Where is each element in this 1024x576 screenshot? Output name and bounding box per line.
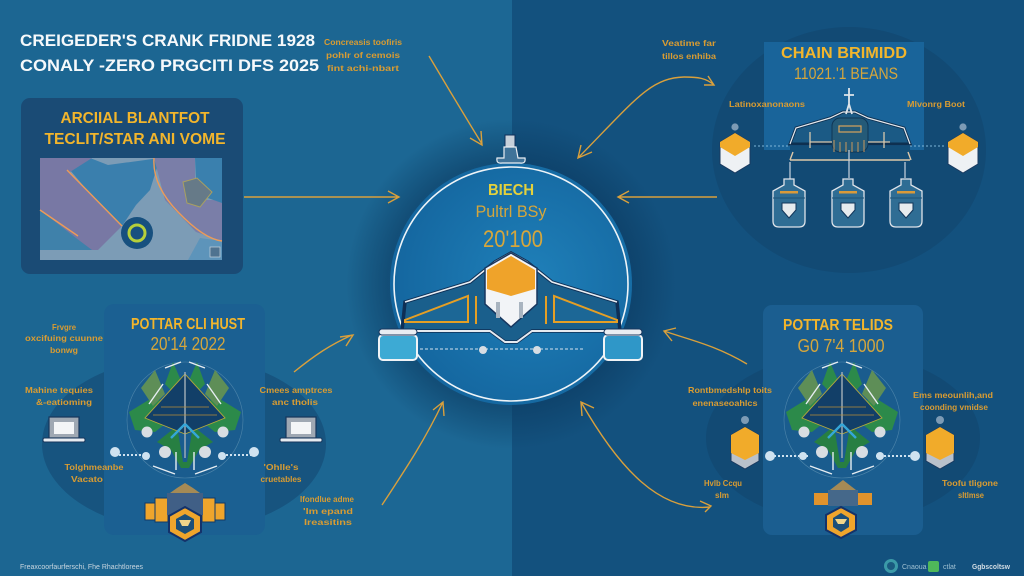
arrow: chain bridge to hub bbox=[618, 76, 717, 203]
arrow: map to hub bbox=[244, 191, 399, 203]
heading: 11021.'1 BEANS bbox=[794, 64, 898, 83]
title: CREIGEDER'S CRANK FRIDNE 1928 bbox=[20, 31, 315, 50]
labels: Frvgre bbox=[52, 322, 76, 332]
icon: cube right bbox=[926, 416, 954, 469]
footer logos bbox=[884, 559, 1011, 573]
icon: cube left bbox=[731, 416, 759, 469]
footer logos: ctlat bbox=[943, 564, 956, 571]
arrow: lower right to hub bbox=[664, 328, 747, 364]
callout: top right text bbox=[662, 38, 717, 61]
icon: network globe bbox=[784, 362, 900, 478]
panel: map bbox=[21, 98, 243, 274]
heading: G0 7'4 1000 bbox=[798, 336, 884, 356]
labels: Vacato bbox=[71, 474, 103, 484]
bridge structure bbox=[395, 253, 640, 354]
labels: Latinoxanonaons bbox=[729, 99, 805, 109]
hub heading: 20'100 bbox=[483, 226, 543, 253]
labels: sItlmse bbox=[958, 490, 984, 500]
icon: left water tank bbox=[379, 329, 417, 360]
panel: lower right bbox=[688, 305, 998, 538]
icon: node dots bbox=[110, 447, 259, 460]
labels: Toofu tligone bbox=[942, 478, 998, 488]
icon: cube right bbox=[948, 123, 978, 173]
labels: Mahine tequies bbox=[25, 385, 93, 395]
arrow: lower centre left to hub bbox=[382, 402, 444, 505]
callout: top right text: Veatime far bbox=[662, 38, 717, 48]
labels bbox=[688, 385, 998, 500]
labels: Hvlb Ccqu bbox=[704, 478, 742, 488]
panel: lower left bbox=[25, 304, 354, 541]
icon: badge bbox=[145, 483, 225, 541]
heading bbox=[131, 316, 245, 354]
labels: Tolghmeanbe bbox=[64, 462, 124, 472]
labels: 'Ohlle's bbox=[264, 462, 299, 472]
hub heading: BIECH bbox=[488, 182, 534, 199]
heading: POTTAR TELIDS bbox=[783, 317, 893, 334]
labels: Mlvonrg Boot bbox=[907, 99, 965, 109]
central hub bbox=[379, 135, 642, 405]
heading bbox=[781, 45, 907, 83]
labels: bonwg bbox=[50, 345, 78, 355]
icon: cube left bbox=[720, 123, 750, 173]
title bbox=[20, 31, 319, 75]
callout: top right text: tillos enhiba bbox=[662, 51, 716, 61]
heading: CHAIN BRIMIDD bbox=[781, 45, 907, 62]
icon: laptop left bbox=[43, 417, 85, 442]
footer logos: Cnaoua bbox=[902, 564, 927, 571]
labels: &-eatioming bbox=[36, 397, 92, 407]
labels: cruetables bbox=[260, 474, 302, 484]
panel heading bbox=[44, 110, 226, 148]
labels: Ifondlue adme bbox=[300, 494, 354, 504]
hub heading bbox=[476, 182, 547, 253]
labels: oxcifuing cuunne bbox=[25, 333, 103, 343]
title: CONALY -ZERO PRGCITI DFS 2025 bbox=[20, 56, 319, 75]
icon: badge bbox=[814, 480, 872, 538]
panel: chain bridge bbox=[712, 27, 986, 273]
callout: top left text: Concreasis toofiris bbox=[324, 37, 402, 47]
labels: enenaseoahlcs bbox=[692, 398, 758, 408]
panel heading: ARCIIAL BLANTFOT bbox=[60, 110, 210, 127]
top valve bbox=[497, 135, 525, 163]
labels: sIm bbox=[715, 490, 729, 500]
icon: central cube bbox=[485, 253, 537, 327]
arrow: lower centre right to hub bbox=[581, 402, 711, 512]
labels: coonding vmidse bbox=[920, 402, 988, 412]
arrow: lower left to hub bbox=[294, 335, 353, 372]
bridge structure bbox=[790, 88, 912, 180]
labels bbox=[729, 99, 965, 109]
icon: hanging jars bbox=[773, 179, 922, 227]
labels: anc tholis bbox=[272, 397, 318, 407]
labels bbox=[25, 322, 354, 527]
labels: Ems meounlih,and bbox=[913, 390, 993, 400]
labels: Ireasitins bbox=[304, 517, 352, 527]
icon: laptop right bbox=[280, 417, 322, 442]
heading: POTTAR CLI HUST bbox=[131, 316, 245, 333]
icon: right water tank bbox=[604, 329, 642, 360]
icon: network globe bbox=[127, 362, 243, 478]
callout: top left text: pohlr of cemois bbox=[326, 50, 400, 60]
panel heading: TECLIT/STAR ANI VOME bbox=[44, 131, 226, 148]
footer logos: Ggbscoltsw bbox=[972, 564, 1011, 571]
arrow: top left to hub bbox=[429, 56, 482, 145]
map image bbox=[40, 158, 222, 260]
labels: Rontbmedshlp toits bbox=[688, 385, 772, 395]
callout: top left text bbox=[324, 37, 402, 73]
heading bbox=[783, 317, 893, 356]
callout: top left text: fint achi-nbart bbox=[327, 63, 399, 73]
labels: Cmees amptrces bbox=[260, 385, 333, 395]
map marker bbox=[121, 217, 153, 249]
footer credit: Freaxcoorfaurferschi, Fhe Rhachtlorees bbox=[20, 564, 143, 571]
hub heading: Pultrl BSy bbox=[476, 202, 547, 221]
arrow: top right to hub bbox=[578, 77, 684, 158]
heading: 20'14 2022 bbox=[150, 334, 226, 354]
labels: 'Im epand bbox=[303, 506, 353, 516]
